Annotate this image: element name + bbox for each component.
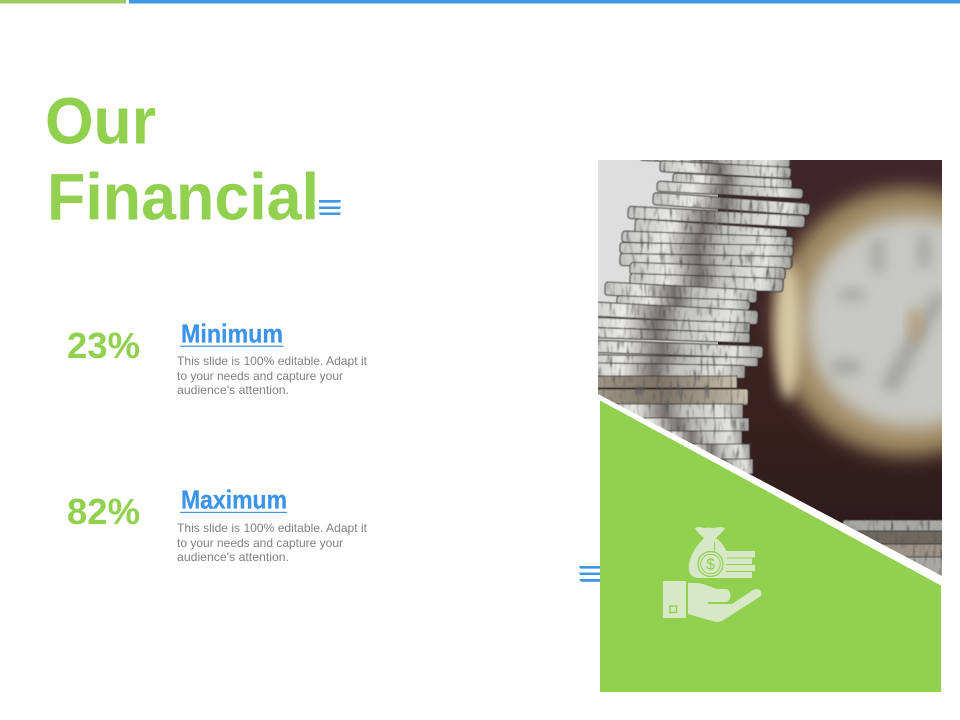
- description text: This slide is 100% editable. Adapt it: [177, 521, 368, 535]
- green triangle panel: [600, 400, 941, 692]
- money bag: [689, 527, 727, 578]
- title: Financial: [47, 160, 319, 234]
- white diagonal band: [596, 393, 944, 700]
- description text: [177, 521, 368, 564]
- cuff button: [670, 606, 676, 612]
- icon: menu lines beside panel: [579, 566, 600, 582]
- bag slit: [714, 542, 715, 552]
- title: Our: [45, 84, 156, 158]
- dollar medallion: $: [706, 556, 715, 574]
- description text: This slide is 100% editable. Adapt it: [177, 354, 368, 368]
- photo: coins and clock: [598, 160, 942, 576]
- icon: menu lines beside title: [319, 200, 341, 215]
- top accent bars: [0, 0, 960, 4]
- description text: [177, 354, 368, 397]
- description text: to your needs and capture your: [177, 536, 343, 550]
- metric: minimum: [67, 318, 368, 397]
- title: [45, 84, 319, 234]
- heading: Minimum: Minimum: [181, 318, 283, 348]
- icon: hand holding money bag and coins: [663, 527, 761, 622]
- description text: audience's attention.: [177, 383, 289, 397]
- heading: Maximum: Maximum: [181, 484, 287, 514]
- cuff: [663, 581, 686, 618]
- description text: to your needs and capture your: [177, 369, 343, 383]
- open hand: [688, 583, 761, 622]
- metric: maximum: [67, 484, 368, 564]
- percentage 23%: 23%: [67, 325, 140, 366]
- stacked coins: [724, 551, 755, 578]
- percentage 82%: 82%: [67, 491, 140, 532]
- description text: audience's attention.: [177, 550, 289, 564]
